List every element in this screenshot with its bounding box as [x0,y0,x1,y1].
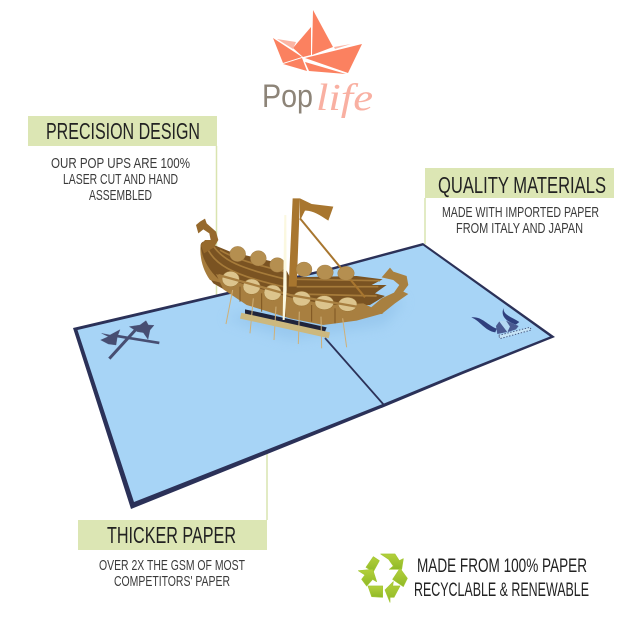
icon: viking helmet [471,308,531,339]
callout: quality materials [425,168,614,237]
thicker heading: THICKER PAPER [107,522,236,548]
precision body text: LASER CUT AND HAND [63,171,178,188]
ship: front hull [216,274,383,325]
ship: base shadow [245,309,327,332]
icon: recycle symbol [358,554,407,602]
ship: front shields [222,271,357,311]
logo: wordmark: Pop [262,78,313,114]
ship: planks [207,246,380,296]
viking ship [196,198,408,348]
logo: Poplife [262,10,373,119]
quality heading band [425,168,614,198]
ship: back shields [230,246,354,280]
ship: back hull [200,241,387,307]
icon: crossed axes [101,321,159,359]
precision body text [51,155,190,204]
thicker body text: COMPETITORS' PAPER [114,573,230,590]
logo: wordmark [262,77,373,119]
callout: thicker paper [78,520,267,590]
logo: paper boat [273,10,362,74]
ship: display base [241,316,329,335]
precision heading band [28,116,217,146]
callout: precision design [28,116,217,204]
pop-up card [73,243,555,509]
ship: rail [218,275,357,307]
precision body text: ASSEMBLED [89,187,152,204]
connector lines [216,146,425,520]
ship: hull outer stern planks [200,245,223,283]
ship: mast and flag [289,198,365,297]
ship: oars [226,290,347,348]
ship shadow [225,300,405,340]
card fold line [325,338,384,405]
ship: stern dragon [196,219,218,253]
logo: wordmark: life [316,77,373,119]
precision body text: OUR POP UPS ARE 100% [51,155,190,172]
ship: hull side lines [240,287,335,323]
thicker body text: OVER 2X THE GSM OF MOST [99,557,245,574]
recycling text [414,556,589,601]
thicker heading band [78,520,267,550]
ship: prow dragon [363,268,408,314]
ship: white paper strip [283,215,287,320]
thicker body text [99,557,245,590]
quality body text [442,204,599,237]
card blue panels [78,246,550,502]
card dark edge [73,243,555,509]
precision heading: PRECISION DESIGN [46,118,200,144]
